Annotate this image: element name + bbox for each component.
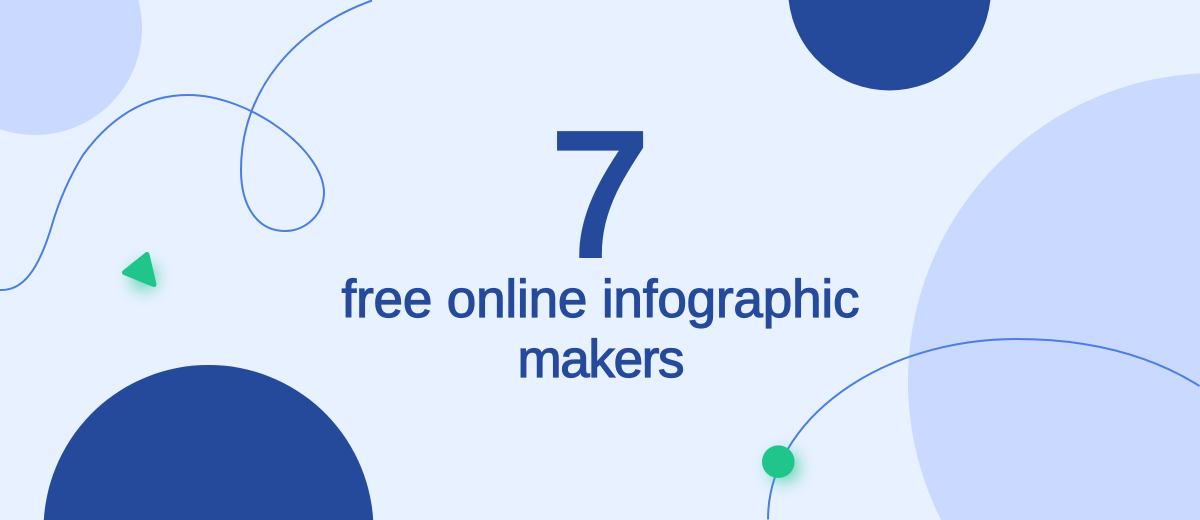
curve: arc bottom-right [768,339,1200,520]
big number 7: 7 [551,98,649,293]
circle: top-right dark [789,0,990,90]
circle: right large light [908,73,1200,520]
circle: bottom-left dark [44,365,373,520]
circle: top-left light [0,0,142,135]
heading: free online infographic makers: free online infographic [342,270,860,329]
icon: green triangle [124,254,157,290]
curve: looping line top-left [0,0,372,290]
icon: green dot [762,445,799,482]
heading: free online infographic makers [342,270,860,389]
heading: free online infographic makers: makers [518,330,684,389]
